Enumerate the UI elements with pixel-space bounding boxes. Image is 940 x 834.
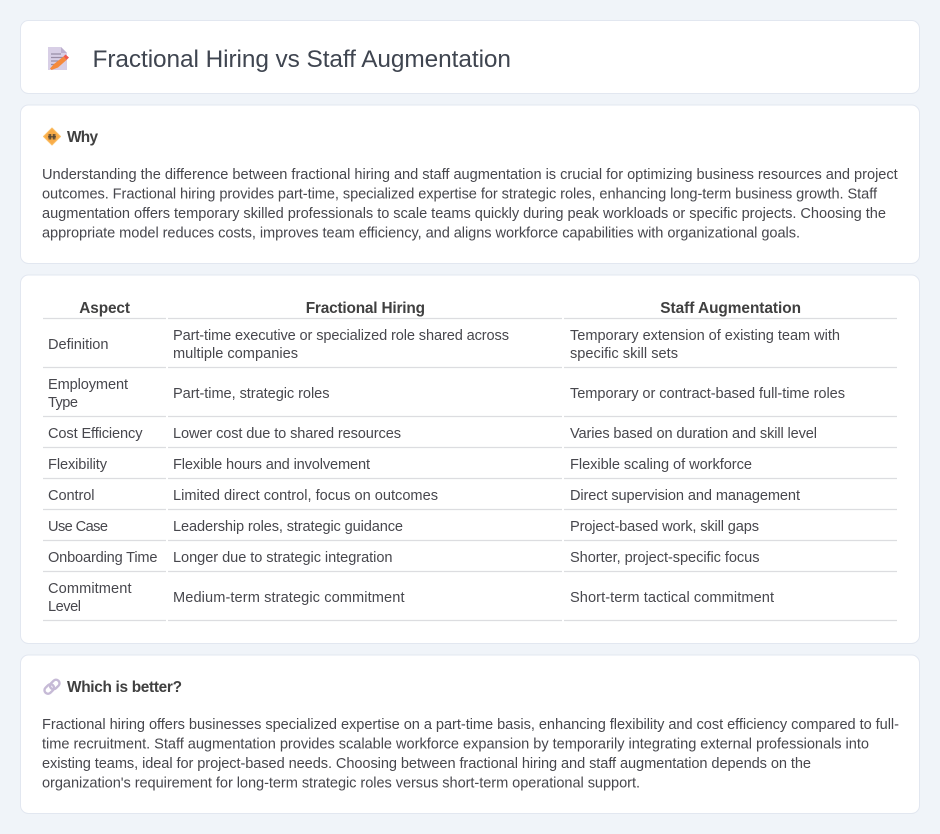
icon: link (43, 678, 61, 695)
text block: why (42, 167, 898, 241)
row: employment type: Part-time, strategic roles (173, 386, 330, 402)
panel: which is better (20, 655, 920, 814)
row: commitment level: Medium-term strategic commitment (173, 590, 404, 606)
row: cost efficiency (48, 426, 817, 442)
icon: document with pencil (48, 47, 69, 70)
row: cost efficiency: Lower cost due to shared resources (173, 426, 401, 442)
row: employment type: Type (48, 395, 78, 411)
panel: why (20, 105, 920, 264)
text block: why: Understanding the difference between fractional hiring and staff augmentation is crucial for optimizing business resources and project (42, 167, 898, 183)
row: use case: Project-based work, skill gaps (570, 519, 759, 535)
row: onboarding time: Onboarding Time (48, 550, 158, 566)
panel: header (20, 20, 920, 94)
row: employment type (48, 377, 845, 411)
row: commitment level: Short-term tactical commitment (570, 590, 774, 606)
table header: Aspect (79, 300, 130, 317)
row: use case: Use Case (48, 519, 108, 535)
row: cost efficiency: Varies based on duration and skill level (570, 426, 817, 442)
row: flexibility: Flexibility (48, 457, 108, 473)
row: control: Direct supervision and management (570, 488, 800, 504)
row: employment type: Employment (48, 377, 128, 393)
text block: which is better: Fractional hiring offers businesses specialized expertise on a part-time basis, enhancing flexibility and cost efficiency compared to full- (42, 717, 899, 733)
row: use case: Leadership roles, strategic guidance (173, 519, 403, 535)
heading: which is better: Which is better? (67, 679, 182, 696)
row: cost efficiency: Cost Efficiency (48, 426, 143, 442)
heading: why: Why (67, 129, 98, 146)
text block: which is better: existing teams, ideal for project-based needs. Choosing between fractional hiring and staff augmentation depends on the (42, 756, 811, 772)
panel: comparison table (20, 275, 920, 644)
title: Fractional Hiring vs Staff Augmentation (92, 46, 511, 73)
row: commitment level: Level (48, 599, 81, 615)
row: control: Control (48, 488, 94, 504)
icon: diamond sign (44, 128, 60, 145)
row: flexibility (48, 457, 752, 473)
row: onboarding time: Longer due to strategic integration (173, 550, 392, 566)
text block: which is better: organization's requirement for long-term strategic roles versus short-term operational support. (42, 775, 640, 791)
row: definition: specific skill sets (570, 346, 678, 362)
row: definition: Part-time executive or specialized role shared across (173, 328, 509, 344)
row: definition: Temporary extension of existing team with (570, 328, 840, 344)
text block: which is better (42, 717, 899, 791)
row: onboarding time (48, 550, 760, 566)
text block: why: outcomes. Fractional hiring provides part-time, specialized expertise for strategic roles, enhancing long-term business growth. Staff (42, 186, 878, 202)
row: control (48, 488, 800, 504)
row: control: Limited direct control, focus on outcomes (173, 488, 438, 504)
row: definition (48, 328, 840, 362)
row: commitment level: Commitment (48, 581, 132, 597)
row: definition: Definition (48, 337, 108, 353)
row: use case (48, 519, 759, 535)
row: onboarding time: Shorter, project-specific focus (570, 550, 760, 566)
row: flexibility: Flexible hours and involvement (173, 457, 370, 473)
table header (79, 300, 801, 317)
text block: why: augmentation offers temporary skilled professionals to scale teams quickly during peak workloads or specific projects. Choosing the (42, 206, 886, 222)
row: flexibility: Flexible scaling of workforce (570, 457, 752, 473)
text block: why: appropriate model reduces costs, improves team efficiency, and aligns workforce capabilities with organizational goals. (42, 225, 800, 241)
row: commitment level (48, 581, 774, 615)
text block: which is better: time recruitment. Staff augmentation provides scalable workforce expansion by temporarily integrating external professionals into (42, 736, 869, 752)
table header: Staff Augmentation (660, 300, 801, 317)
row: employment type: Temporary or contract-based full-time roles (570, 386, 845, 402)
row: definition: multiple companies (173, 346, 298, 362)
table header: Fractional Hiring (306, 300, 425, 317)
